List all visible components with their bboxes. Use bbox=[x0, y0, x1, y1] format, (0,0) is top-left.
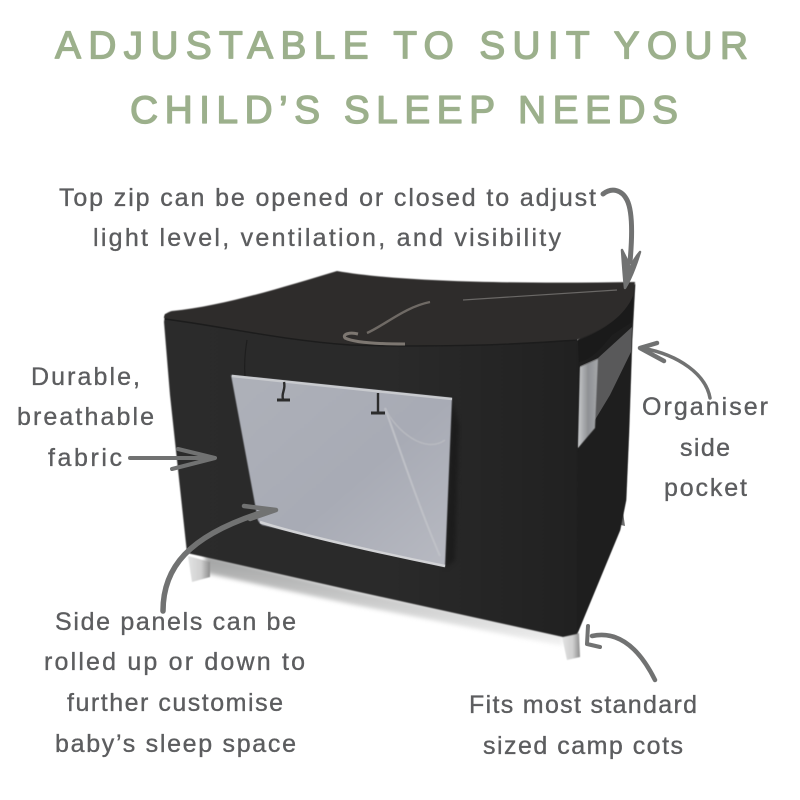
label: durable fabric: breathable bbox=[17, 403, 154, 431]
arrow: side panels bbox=[163, 506, 276, 611]
title: CHILD’S SLEEP NEEDS bbox=[130, 89, 678, 132]
label: top zip bbox=[59, 184, 596, 252]
tent top bbox=[164, 271, 635, 346]
label: side panels: rolled up or down to bbox=[44, 648, 305, 676]
label: durable fabric: fabric bbox=[48, 444, 122, 472]
photo: blackout cot tent bbox=[164, 271, 635, 660]
title bbox=[55, 24, 748, 132]
arrow: durable fabric bbox=[130, 449, 215, 469]
panel seam shadow bbox=[445, 399, 459, 568]
organiser side pocket bbox=[578, 327, 632, 448]
label: organiser side pocket bbox=[642, 393, 768, 502]
label: side panels bbox=[44, 608, 305, 758]
front seam bbox=[245, 340, 247, 376]
label: side panels: further customise bbox=[67, 689, 283, 717]
panel toggle right bbox=[371, 393, 385, 413]
label: top zip: light level, ventilation, and visibility bbox=[93, 224, 562, 252]
corner trim bbox=[578, 296, 633, 362]
label: organiser side pocket: pocket bbox=[664, 474, 747, 502]
side panel bbox=[231, 375, 452, 567]
label: side panels: baby’s sleep space bbox=[55, 730, 296, 758]
arrow: camp cots bbox=[587, 626, 655, 680]
label: camp cots: Fits most standard bbox=[469, 691, 697, 719]
label: side panels: Side panels can be bbox=[55, 608, 296, 636]
label: durable fabric: Durable, bbox=[31, 363, 140, 391]
label: camp cots bbox=[469, 691, 697, 760]
top zip bbox=[344, 290, 617, 344]
right cot foot bbox=[562, 633, 580, 660]
label: top zip: Top zip can be opened or closed to adjust bbox=[59, 184, 596, 212]
left cot foot bbox=[188, 556, 210, 582]
top front edge line bbox=[165, 319, 577, 346]
arrow: organiser pocket bbox=[640, 343, 710, 398]
label: camp cots: sized camp cots bbox=[483, 732, 683, 760]
back leg flap bbox=[612, 505, 625, 526]
right side wall bbox=[577, 284, 635, 634]
tent body bbox=[164, 284, 635, 637]
arrow: top zip bbox=[603, 190, 640, 288]
label: durable fabric bbox=[17, 363, 154, 472]
pocket mesh strip bbox=[578, 359, 598, 448]
label: organiser side pocket: Organiser bbox=[642, 393, 768, 421]
panel toggle left bbox=[277, 382, 290, 400]
cot frame rail under tent bbox=[205, 555, 563, 646]
label: organiser side pocket: side bbox=[680, 434, 730, 462]
title: ADJUSTABLE TO SUIT YOUR bbox=[55, 24, 748, 68]
